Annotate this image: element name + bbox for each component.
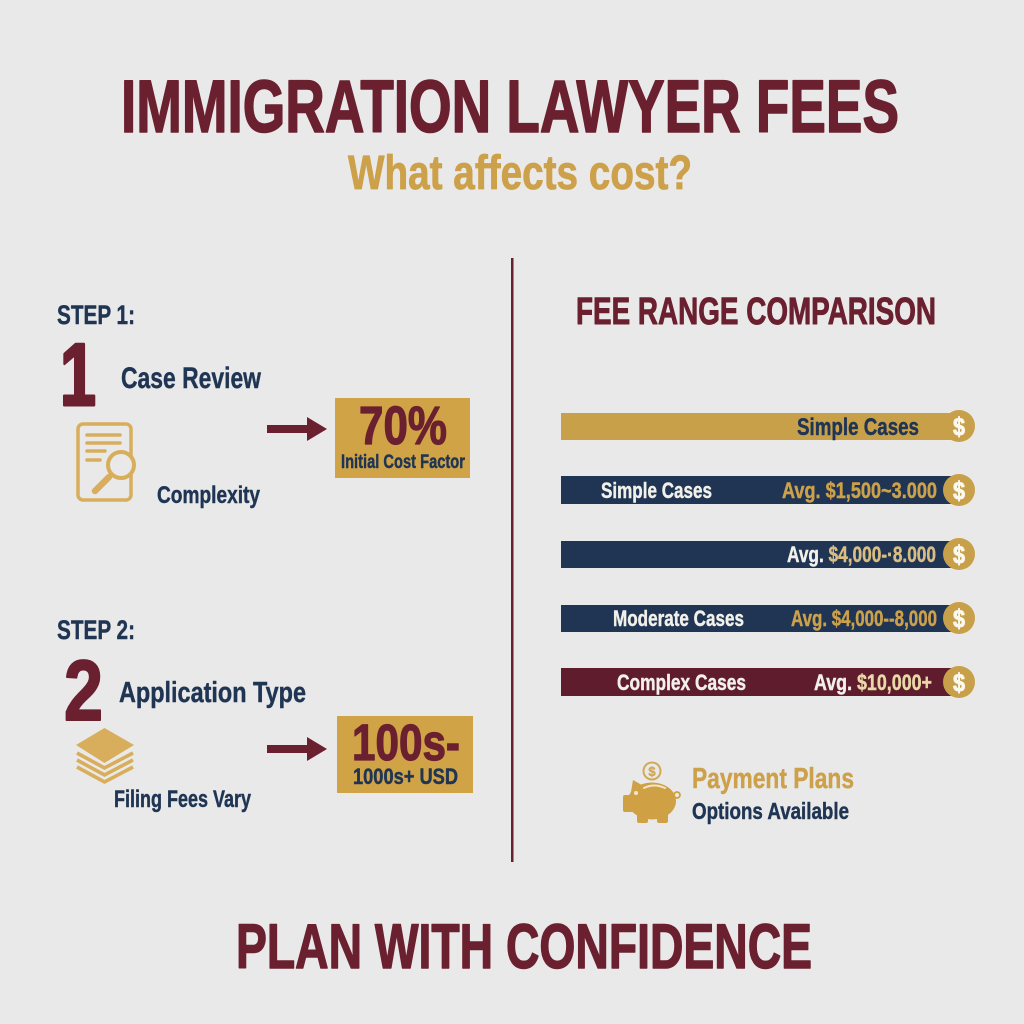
callout: 70 percent: 70% <box>359 396 447 456</box>
arrow <box>267 737 327 761</box>
bar: unlabelled range: $ <box>953 541 965 569</box>
bar: simple cases: Simple Cases <box>601 478 712 503</box>
chart: fee range bars <box>561 410 975 698</box>
icon: piggy bank with coin <box>623 762 680 823</box>
icon: document with magnifier <box>78 424 134 500</box>
icon: stacked layers <box>76 728 134 782</box>
bar: simple cases: $ <box>953 477 965 505</box>
bar: simple cases <box>561 474 975 506</box>
center divider <box>511 258 514 862</box>
bar: complex cases: $ <box>953 669 965 697</box>
bar: unlabelled range: Avg. $4,000-·8.000 <box>787 542 936 567</box>
bar: simple cases: Avg. $1,500~3.000 <box>782 478 937 503</box>
step 2 heading: Application Type <box>119 677 306 709</box>
bar: complex cases <box>561 666 975 698</box>
step 2 label: STEP 2: <box>57 615 135 645</box>
step 2 number: 2 <box>64 644 103 739</box>
bar: simple cases header: $ <box>953 413 965 441</box>
complexity label: Complexity <box>157 482 261 509</box>
bar: complex cases: Complex Cases <box>617 670 746 695</box>
bar: simple cases header <box>561 410 975 442</box>
bar: moderate cases <box>561 602 975 634</box>
bar: simple cases header: Simple Cases <box>797 414 919 441</box>
panel: step 2 <box>57 615 473 813</box>
bar: moderate cases: Avg. $4,000--8,000 <box>791 606 937 631</box>
step 1 label: STEP 1: <box>57 300 135 330</box>
filing fees label: Filing Fees Vary <box>114 786 251 813</box>
bar: moderate cases: $ <box>953 605 965 633</box>
bar: unlabelled range <box>561 538 975 570</box>
callout: 70 percent: Initial Cost Factor <box>341 452 465 473</box>
step 1 heading: Case Review <box>121 362 261 395</box>
subtitle: What affects cost? <box>348 147 692 200</box>
payment plans heading: Payment Plans <box>692 763 854 795</box>
panel: step 1 <box>57 300 470 509</box>
step 1 number: 1 <box>60 325 96 424</box>
callout: 70 percent <box>335 396 470 478</box>
payment plans subtext: Options Available <box>692 798 849 824</box>
callout: filing cost: 1000s+ USD <box>353 764 458 789</box>
bar: moderate cases: Moderate Cases <box>613 606 744 631</box>
arrow <box>267 417 327 441</box>
icon: piggy bank with coin: $ <box>648 764 656 779</box>
callout: filing cost: 100s- <box>352 714 460 771</box>
bar: complex cases: Avg. $10,000+ <box>814 670 932 695</box>
closing banner: PLAN WITH CONFIDENCE <box>236 912 812 982</box>
callout: filing cost <box>337 714 473 793</box>
